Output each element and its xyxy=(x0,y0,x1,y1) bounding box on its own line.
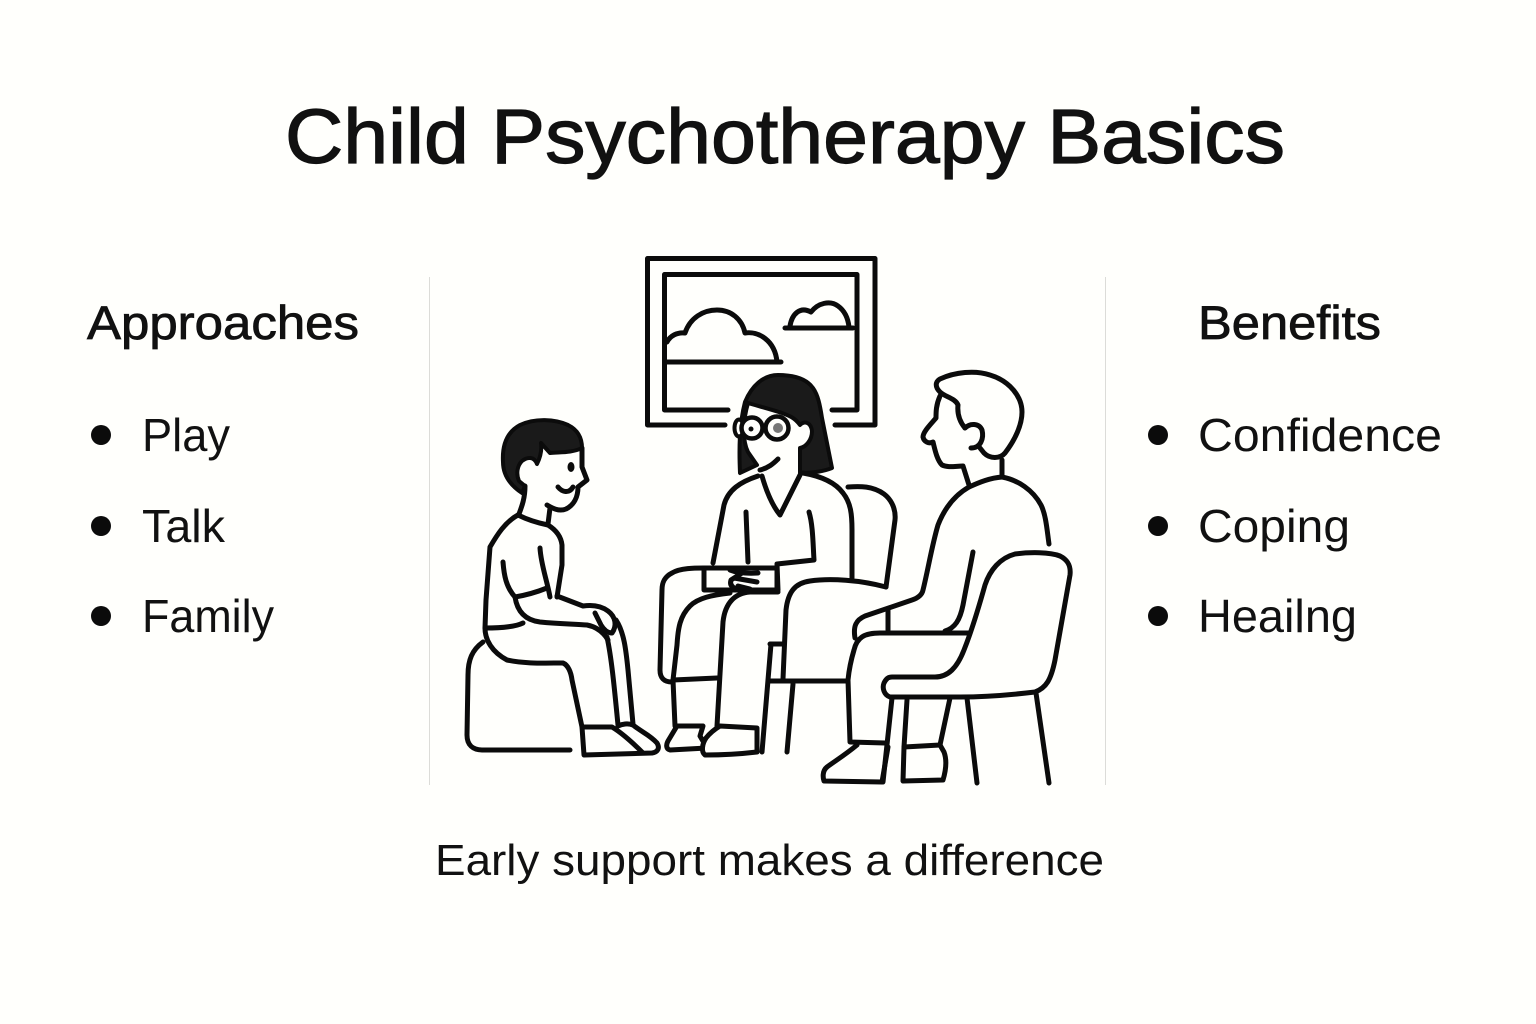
figure: father chair and body xyxy=(823,372,1070,783)
therapist face details xyxy=(760,459,778,470)
list item: talk: Talk xyxy=(142,500,226,552)
boy face xyxy=(547,448,587,510)
boy body xyxy=(518,515,562,597)
boy legs and shoes xyxy=(485,628,582,727)
father legs xyxy=(848,633,970,743)
father chair xyxy=(883,553,1070,697)
therapist arm chair side xyxy=(660,568,704,682)
list item: play: Play xyxy=(142,409,230,461)
list item: talk xyxy=(91,500,226,552)
footer tagline: Early support makes a difference xyxy=(435,836,1104,885)
panel: benefits xyxy=(1148,296,1442,642)
title: Child Psychotherapy Basics xyxy=(285,94,1285,180)
list item: play xyxy=(91,409,230,461)
father hair xyxy=(936,372,1022,458)
list item: family: Family xyxy=(142,590,274,642)
illustration: therapy session xyxy=(467,258,1070,783)
heading: approaches: Approaches xyxy=(87,296,359,349)
figure: boy on stool xyxy=(467,420,658,755)
father back leg xyxy=(904,698,950,747)
stool xyxy=(467,642,570,750)
therapist legs xyxy=(673,593,730,726)
father chair legs xyxy=(883,693,1049,783)
figure: therapist chair xyxy=(770,487,895,752)
father ear xyxy=(965,424,983,448)
father torso xyxy=(969,477,1049,544)
therapist glasses xyxy=(734,416,788,440)
boy hair xyxy=(503,420,582,493)
heading: benefits: Benefits xyxy=(1198,296,1381,349)
list item: confidence: Confidence xyxy=(1198,409,1442,461)
therapist hands xyxy=(704,568,777,590)
figure: therapist xyxy=(660,375,852,755)
father face xyxy=(923,396,969,485)
list item: coping: Coping xyxy=(1198,500,1350,552)
list item: healing: Heailng xyxy=(1198,590,1357,642)
therapist hair xyxy=(740,375,832,473)
icon: framed picture with clouds xyxy=(648,258,875,425)
panel: approaches xyxy=(87,296,359,642)
